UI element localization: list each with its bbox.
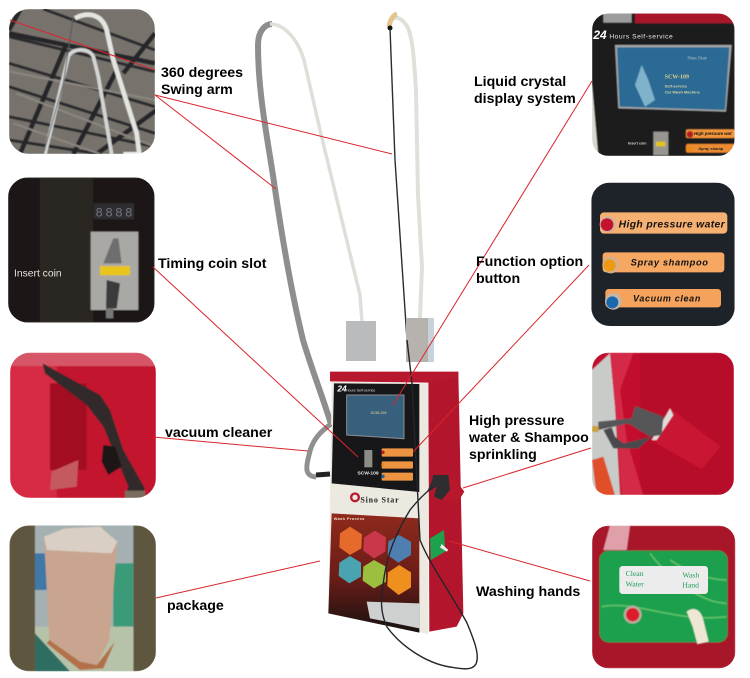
arm mount boxes: [346, 318, 434, 362]
button: spray shampoo: Spray shampoo: [631, 257, 708, 267]
logo: [350, 492, 399, 505]
model number: SCW-109: [357, 471, 379, 477]
button: high pressure water: High pressure water: [619, 219, 726, 230]
coin label: Insert coin: [628, 142, 646, 146]
digit display: 8888: [95, 206, 133, 221]
left swing arm: [258, 24, 362, 424]
vacuum hose loop: [307, 424, 331, 477]
panel: LCD display photo: [592, 13, 735, 156]
panel: washing hands photo: [592, 526, 735, 668]
screen text: Self-service: [665, 83, 688, 88]
screen text: SCW-109: [371, 411, 386, 415]
label: liquid crystal display: display system: [474, 91, 576, 107]
panel: coin slot photo: [8, 177, 155, 323]
screen text: Car Wash Machine: [665, 90, 701, 95]
top cap: [330, 372, 458, 383]
label: washing hands: Washing hands: [476, 584, 580, 600]
panel: swing arm photo: [9, 9, 157, 155]
button: high pressure water: [600, 212, 727, 234]
black control panel: [332, 383, 419, 492]
right swing arm: [388, 14, 422, 340]
button: vacuum clean: Vacuum clean: [633, 294, 701, 304]
panel: LCD display photo: Hours Self-service: [609, 34, 673, 41]
machine: Hours Self-service: [346, 388, 375, 392]
screen text: [665, 56, 708, 95]
label: vacuum cleaner: vacuum cleaner: [165, 425, 273, 441]
label: swing arm: Swing arm: [161, 82, 233, 98]
sign plate: Clean: [626, 569, 644, 578]
panel: function buttons photo: [591, 183, 735, 326]
screen text: Sino Star: [687, 56, 708, 61]
screen text: SCW-109: [665, 75, 689, 81]
button label shampoo: Spray shamp: [698, 146, 724, 151]
sign plate: [619, 566, 708, 594]
header text: 24: [336, 384, 347, 394]
nozzle and holster: [427, 475, 464, 504]
hose cable over machine: [382, 340, 477, 669]
wash hands plate: [430, 530, 445, 560]
panel: vacuum cleaner photo: [10, 353, 156, 498]
panel: package photo: [9, 525, 156, 671]
buttons: [381, 448, 413, 481]
white front panel: [328, 382, 428, 634]
label: high pressure water: water & Shampoo: [468, 430, 589, 446]
leader lines: [10, 20, 592, 598]
side body: [428, 372, 463, 632]
label: function button: Function option: [476, 254, 583, 270]
sign plate: Wash: [682, 570, 699, 579]
header text: 24: [592, 28, 607, 42]
panel: high pressure nozzle photo: [592, 353, 734, 495]
label: function button: button: [476, 271, 520, 287]
sign plate: Hand: [682, 581, 699, 590]
label: high pressure water: sprinkling: [469, 447, 537, 463]
wash process panel: [328, 513, 419, 633]
sign plate: Water: [626, 580, 644, 589]
label: swing arm: 360 degrees: [161, 65, 243, 81]
touch screen: [347, 395, 404, 439]
label: package: package: [167, 598, 224, 614]
hexagons: [339, 527, 411, 595]
label: timing coin slot: Timing coin slot: [158, 256, 267, 272]
button label high pressure: High pressure wat: [694, 131, 732, 136]
button: spray shampoo: [602, 252, 724, 273]
label: liquid crystal display: Liquid crystal: [474, 74, 566, 90]
insert coin text: Insert coin: [14, 269, 62, 280]
label: high pressure water: High pressure: [469, 413, 564, 429]
panel title: Wash Process: [334, 516, 365, 521]
machine: [328, 372, 464, 634]
coin slot: [364, 450, 372, 467]
button: vacuum clean: [605, 289, 721, 310]
logo: Sino Star: [360, 496, 399, 505]
